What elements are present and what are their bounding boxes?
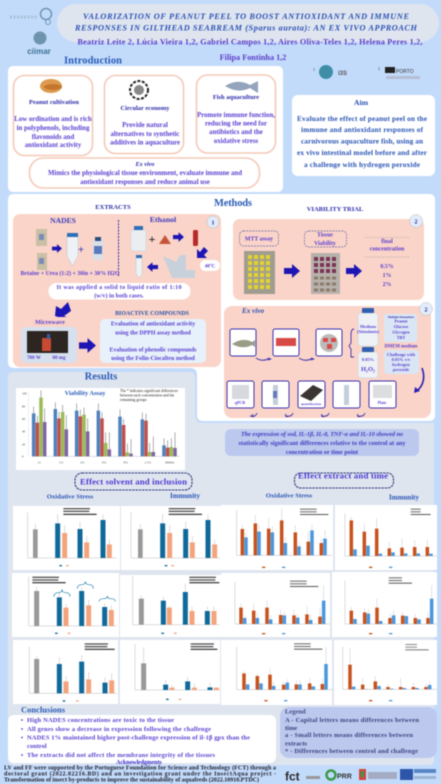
- card: peanut cultivation: Low ordination and is rich: [14, 116, 92, 123]
- panel: ex vivo: [224, 302, 432, 418]
- arrows: workflow return: [250, 413, 365, 417]
- panel: legend: Legend: [285, 708, 306, 716]
- panel: legend: A - Capital letters means differences between: [285, 717, 419, 724]
- callout: solid to liquid ratio: It was applied a solid to liquid ratio of 1:10: [56, 285, 182, 291]
- icon: microwave: 700 W: [27, 356, 41, 361]
- label: ethanol: Ethanol: [150, 215, 177, 224]
- icon: microwave: 80 mg: [53, 356, 66, 361]
- card: circular economy: Provide natural: [122, 122, 168, 129]
- step: qPCR: qPCR: [235, 400, 245, 405]
- card: ex vivo: Ex vivo: [134, 161, 155, 168]
- heading: effect solvent and inclusion: Effect solvent and inclusion: [80, 476, 187, 486]
- text box: bioactive compounds: Evaluation of antioxidant activity: [111, 322, 195, 328]
- panel: methods: [8, 194, 435, 421]
- card: ex vivo: antioxidant responses and reduce animal use: [80, 179, 210, 186]
- card: fish aquaculture: antibiotics and the: [209, 129, 263, 136]
- icon: medium bottle: (Stimulants): [357, 329, 380, 334]
- text box: bioactive compounds: [100, 319, 206, 363]
- text: acknowledgements: Transformation of insect by-products to improve the sustainability of aquafeeds (2022.10910.PTDC): [4, 776, 259, 784]
- callout: gene expression: [225, 429, 419, 456]
- step: intestine: [273, 329, 299, 356]
- logos: funders: fct: [285, 770, 300, 784]
- label: dmem: DMEM medium: [385, 344, 418, 350]
- step: plate: Plate: [378, 400, 387, 405]
- panel: extracts: [13, 214, 221, 367]
- title: RESPONSES IN GILTHEAD SEABREAM (Sparus aurata): AN EX VIVO APPROACH: [74, 24, 418, 32]
- chart: viability assay: 100: [22, 391, 27, 395]
- chart: viability assay: 1%: [59, 460, 63, 464]
- badge: 3: 2: [424, 308, 428, 314]
- text: final concentration: final: [381, 239, 393, 245]
- heading: extracts: EXTRACTS: [95, 204, 131, 211]
- heading: viability trial: VIABILITY TRIAL: [307, 206, 364, 213]
- label: mtt assay: MTT assay: [245, 236, 273, 242]
- step: qPCR: [227, 381, 254, 408]
- chart note: between each concentration and the: [120, 394, 174, 398]
- arrow: curved down: [414, 368, 424, 393]
- arrow: to bioactive compounds: [79, 338, 96, 353]
- arrow: plate to plate: [284, 264, 300, 278]
- chart: extract row 3 left: [221, 640, 333, 705]
- panel: conclusions: NADES 1% maintained higher post-challenge expression of il-1β gpx than the: [27, 734, 250, 742]
- chart: solvent row 3 right: [120, 640, 220, 704]
- badge: 2: 2: [414, 220, 418, 226]
- chart: viability assay: Ct: [38, 460, 41, 464]
- step: tube: [262, 381, 289, 408]
- text box: challenge: peroxide: [393, 367, 409, 372]
- step: spectrophotometer: [298, 381, 325, 408]
- chart note: remaining groups: [120, 398, 147, 402]
- text box: challenge: Challenge with: [387, 352, 416, 357]
- chart note: The * indicates significant differences: [120, 389, 178, 393]
- card: fish aquaculture: Promote immune function,: [197, 112, 275, 119]
- step: spectrophotometer: quantification: [301, 402, 321, 406]
- text: final concentration: [365, 238, 409, 288]
- panel: aim: Aim: [354, 98, 369, 107]
- authors: Filipa Fontinha 1,2: [220, 53, 286, 62]
- panel: conclusions: [8, 715, 276, 763]
- panel: conclusions: High NADES concentrations are toxic to the tissue: [27, 717, 174, 724]
- chart: extract row 2 left: [221, 573, 330, 637]
- text box: challenge: 0.05% v/v: [392, 357, 411, 362]
- heading: effect solvent and inclusion: [75, 473, 192, 490]
- chart: viability assay: 20: [22, 442, 26, 446]
- text box: biomarkers: Multiple biomarkers: [388, 315, 415, 319]
- arrow: to microwave: [55, 302, 71, 317]
- panel: viability trial: [233, 214, 424, 300]
- chart: viability assay: 0: [22, 455, 24, 459]
- chart: solvent row 3 left: [13, 640, 118, 704]
- label: 40 degrees: [200, 260, 220, 271]
- card: circular economy: additives in aquaculture: [110, 140, 180, 146]
- label: tissue viability: [304, 231, 346, 247]
- text box: biomarkers: Peanut: [395, 318, 408, 324]
- panel: aim: immune and antioxidant responses of: [301, 125, 424, 134]
- heading: methods: Methods: [214, 198, 252, 209]
- text: final concentration: 2%: [383, 282, 392, 288]
- arrow: plate to concentrations: [346, 264, 362, 278]
- panel: legend: [280, 707, 437, 758]
- panel: legend: * - Differences between control and challenge: [285, 748, 418, 755]
- text box: biomarkers: Glycogen: [392, 330, 410, 334]
- text: final concentration: concentration: [370, 246, 405, 252]
- icon: peroxide bottle: H₂O₂: [361, 366, 375, 373]
- card: peanut cultivation: Peanut cultivation: [29, 99, 79, 106]
- label: immunity right: Immunity: [389, 494, 419, 502]
- chart title: Viability Assay: [65, 390, 106, 397]
- text box: biomarkers: [384, 314, 417, 342]
- text box: biomarkers: Glucose: [394, 324, 408, 329]
- chart: solvent row 1 right: [121, 506, 221, 570]
- chart: viability assay: 80: [22, 404, 26, 408]
- text: acknowledgements: doctoral grant (2022.02216.BD) and an investigation grant under the InsectAqua project -: [4, 770, 276, 778]
- heading: introduction: Introduction: [64, 56, 122, 66]
- logo: institution 2: [378, 66, 420, 79]
- text box: biomarkers: TBT: [397, 335, 405, 340]
- card: fish aquaculture: Fish aquaculture: [213, 94, 259, 101]
- label: oxidative stress right: Oxidative Stress: [266, 492, 313, 500]
- title: [57, 4, 439, 42]
- icon: ethanol process: [131, 226, 208, 278]
- chart: solvent row 2 left: [12, 573, 119, 637]
- step: plate: [369, 381, 396, 408]
- chart: viability assay: 60: [22, 417, 26, 421]
- chart: viability assay: DMSO: [165, 460, 175, 464]
- text box: bioactive compounds: using the DPPH assay method: [115, 330, 192, 336]
- heading: acknowledgements: Acknowledgments: [116, 760, 162, 766]
- icon: NADES reagents: +: [78, 244, 84, 256]
- chart: viability assay: 2%: [80, 460, 85, 464]
- badge: 3: [420, 302, 432, 316]
- icon: medium bottle: [357, 308, 380, 346]
- label: nades: NADES: [50, 216, 76, 225]
- logos: funders: PRR: [337, 774, 352, 780]
- chart: extract row 3 right: [334, 640, 437, 705]
- logo: institution 1: i3S: [338, 71, 347, 77]
- logo: institution 1: [313, 65, 347, 79]
- chart note: [120, 389, 178, 402]
- card: circular economy: [104, 76, 184, 154]
- text: acknowledgements: LV and FF were supported by the Portuguese Foundation for Science and Technology (FCT) through a: [4, 764, 276, 772]
- icon: medium bottle: Medium: [360, 324, 376, 329]
- text box: challenge: [384, 350, 419, 374]
- callout: solid to liquid ratio: [48, 283, 190, 300]
- logo: ciimar: [27, 32, 51, 56]
- chart: viability assay: 1.5%: [144, 460, 151, 464]
- text box: bioactive compounds: Evaluation of phenolic compounds: [110, 348, 197, 354]
- panel: aim: [292, 95, 435, 176]
- chart: viability assay: 40: [22, 430, 26, 434]
- card: fish aquaculture: reducing the need for: [205, 120, 267, 128]
- panel: introduction: [8, 66, 283, 192]
- chart: extract row 1 right: [335, 505, 437, 570]
- label: immunity left: Immunity: [170, 492, 200, 500]
- icon: brace: [349, 329, 354, 357]
- panel: conclusions: control: [27, 743, 47, 750]
- chart: extract row 2 right: [332, 572, 437, 637]
- panel: legend: extracts: [285, 740, 307, 748]
- badge: 1: 1: [212, 220, 214, 226]
- badge: 1: [207, 216, 219, 228]
- panel: legend: time: [285, 725, 297, 732]
- card: circular economy: alternatives to synthetic: [110, 131, 180, 138]
- label: 40 degrees: 40°C: [205, 264, 216, 270]
- panel: legend: a - Small letters means differences between: [285, 732, 413, 739]
- card: peanut cultivation: [14, 76, 92, 156]
- callout: gene expression: The expression of sod, IL-1β, IL-8, TNF-α and IL-10 showed no: [241, 431, 403, 438]
- card: peanut cultivation: in polyphenols, including: [17, 125, 90, 132]
- chart: solvent row 1 left: [13, 506, 120, 570]
- card: fish aquaculture: [196, 75, 276, 153]
- panel: results background: [8, 372, 437, 765]
- panel: aim: Evaluate the effect of peanut peel on the: [297, 114, 428, 123]
- title: VALORIZATION OF PEANUT PEEL TO BOOST ANTIOXIDANT AND IMMUNE: [83, 12, 409, 21]
- panel: aim: ex vivo intestinal model before and after: [297, 148, 428, 157]
- card: peanut cultivation: antioxidant activity: [25, 142, 82, 149]
- heading: bioactive compounds: BIOACTIVE COMPOUNDS: [115, 311, 190, 317]
- chart: solvent row 2 right: [120, 575, 221, 637]
- chart: viability assay: 4%: [102, 460, 106, 464]
- text: final concentration: 1%: [383, 273, 392, 279]
- panel: aim: carnivorous aquaculture fish, using an: [301, 136, 423, 146]
- chart: extract row 1 left: [221, 505, 333, 570]
- text box: bioactive compounds: using the Folin-Ciocalteu method: [111, 356, 196, 362]
- card: ex vivo: Mimics the physiological tissue environment, evaluate immune and: [48, 170, 242, 177]
- text box: challenge: hydrogen: [392, 362, 410, 367]
- icon: peroxide bottle: [358, 347, 378, 378]
- logo: institution 2: PORTO: [396, 69, 414, 75]
- card: peanut cultivation: flavonoids and: [32, 134, 74, 141]
- callout: solid to liquid ratio: (w/v) in both cases.: [94, 292, 144, 300]
- heading: effect extract and time: Effect extract and time: [298, 470, 388, 480]
- logo: institute swirl: [10, 8, 52, 24]
- icon: NADES reagents: [36, 229, 103, 270]
- image: yellow MTT plate: [244, 251, 275, 294]
- logos: funders: [285, 769, 436, 784]
- panel: aim: a challenge with hydrogen peroxide: [304, 160, 421, 169]
- step: fish: [230, 329, 256, 356]
- text: final concentration: 0.5%: [380, 264, 394, 270]
- icon: microwave: [21, 327, 77, 363]
- authors: [78, 38, 422, 62]
- callout: gene expression: statistically significant differences relative to the control at any: [238, 440, 406, 447]
- card: fish aquaculture: oxidative stress: [214, 138, 258, 145]
- text: acknowledgements: [4, 764, 276, 784]
- heading: conclusions: Conclusions: [21, 704, 66, 714]
- chart: viability assay: 8%: [124, 460, 128, 464]
- logo: ciimar: ciimar: [27, 47, 51, 56]
- badge: 2: [410, 214, 422, 228]
- chart: viability assay: [16, 388, 185, 470]
- logo: institution 1: 1: [313, 67, 315, 72]
- step: tissue wells: [316, 329, 342, 356]
- icon: ethanol process: +: [149, 232, 156, 246]
- callout: gene expression: concentration or time point: [286, 449, 359, 456]
- text: NADES recipe: Betaine + Urea (1:2) + 30in + 30% H2O: [20, 270, 120, 277]
- authors: Beatriz Leite 2, Lúcia Vieira 1,2, Gabriel Campos 1,2, Aires Oliva-Teles 1,2, Helena Peres 1,2,: [78, 38, 422, 46]
- icon: peroxide bottle: 0.05%: [362, 357, 375, 362]
- label: ex vivo: Ex vivo: [241, 307, 265, 315]
- panel: conclusions: All genes show a decrease in expression following the challenge: [27, 726, 211, 733]
- label: tissue viability: Tissue: [317, 232, 333, 238]
- logo: institution 2: 2: [378, 66, 380, 71]
- panel: conclusions: The extracts did not affect the membrane integrity of the tissues: [27, 752, 215, 759]
- label: microwave: Microwave: [35, 319, 65, 326]
- label: mtt assay: [240, 231, 278, 246]
- label: tissue viability: Viability: [314, 241, 336, 247]
- heading: results: Results: [85, 372, 117, 382]
- card: ex vivo: [30, 158, 260, 188]
- heading: effect extract and time: [294, 470, 394, 488]
- step: pipette: [333, 381, 360, 408]
- card: circular economy: Circular economy: [121, 105, 170, 112]
- label: oxidative stress left: Oxidative Stress: [47, 494, 94, 500]
- image: stained plate: [311, 253, 340, 294]
